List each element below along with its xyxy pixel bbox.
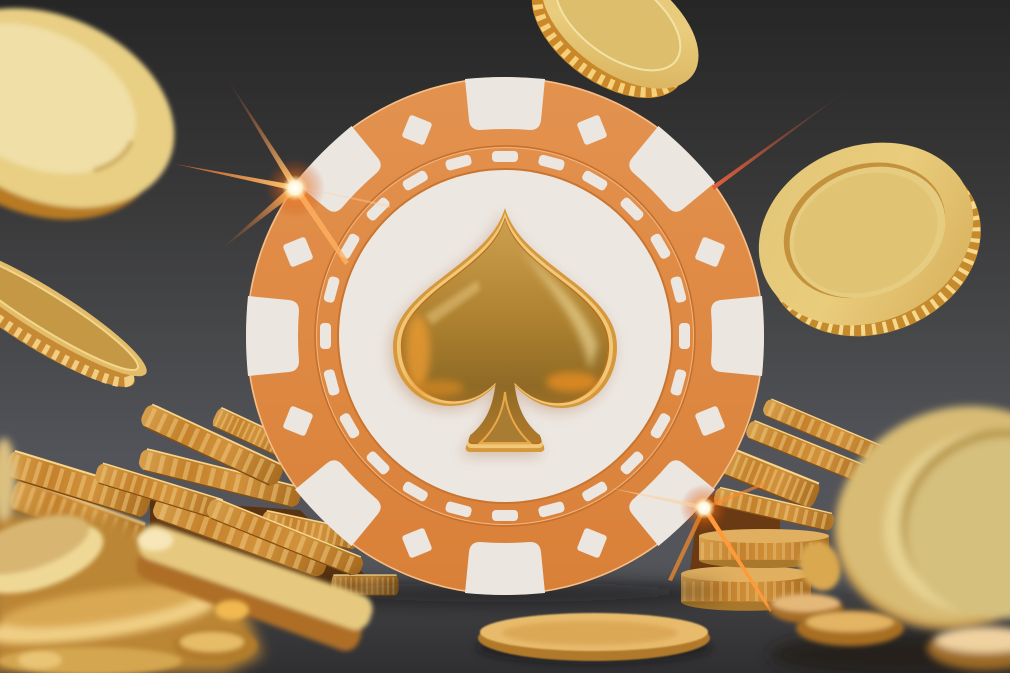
highlight lower left: [416, 380, 464, 396]
white centre disc: [337, 168, 673, 504]
coin: left, tilted edge-on: [0, 229, 158, 407]
highlight streak right: [518, 245, 598, 370]
coin pile: left, behind chip: [3, 402, 399, 596]
chip body: [246, 77, 764, 595]
large blurred coin: [806, 375, 1010, 661]
coin: bottom centre on floor: [476, 613, 712, 664]
sparkle: upper left of chip: [175, 75, 390, 265]
small coin flat: [769, 593, 843, 623]
icon: gold spade: [390, 208, 617, 456]
small bright coins bottom: [0, 600, 257, 673]
far left coin edge: [0, 438, 16, 522]
inner ring lines: [315, 146, 695, 526]
floor shadow: [770, 633, 1010, 673]
coin pile: right, behind chip: [681, 397, 893, 611]
tilted coin left: [0, 503, 112, 608]
long coin to chip foot: [132, 520, 377, 655]
white dashes ring: [320, 151, 690, 521]
coin: top centre: [508, 0, 722, 127]
foreground coins: bottom right, blurred: [769, 375, 1010, 673]
highlight lower right: [546, 372, 598, 392]
chip rim highlight: [247, 78, 763, 594]
medium coin flat: [796, 610, 904, 646]
spade stem inset: [480, 392, 530, 443]
coin: right, large: [731, 110, 1009, 369]
highlight upper left: [425, 280, 480, 325]
poker chip: [246, 77, 764, 602]
blurred coin base mass: [0, 510, 262, 673]
chip shadow: [285, 582, 725, 602]
bottom right coin: [927, 626, 1010, 670]
small white diamonds: [282, 114, 726, 559]
foreground coins: bottom left, blurred: [0, 438, 377, 673]
small coin standing: [793, 536, 847, 596]
light streak: upper right of chip: [712, 88, 850, 190]
sparkle: lower right of chip: [610, 482, 772, 612]
white edge blocks: [246, 77, 764, 595]
spade soft shadow: [390, 212, 614, 456]
spade bevelled rim: [393, 208, 617, 452]
shadow gaps between coins: [150, 500, 380, 590]
highlight left glow: [406, 316, 430, 388]
wide coin middle: [0, 577, 216, 654]
coin: top left, blurred: [0, 0, 206, 260]
spade polished face: [403, 219, 607, 442]
